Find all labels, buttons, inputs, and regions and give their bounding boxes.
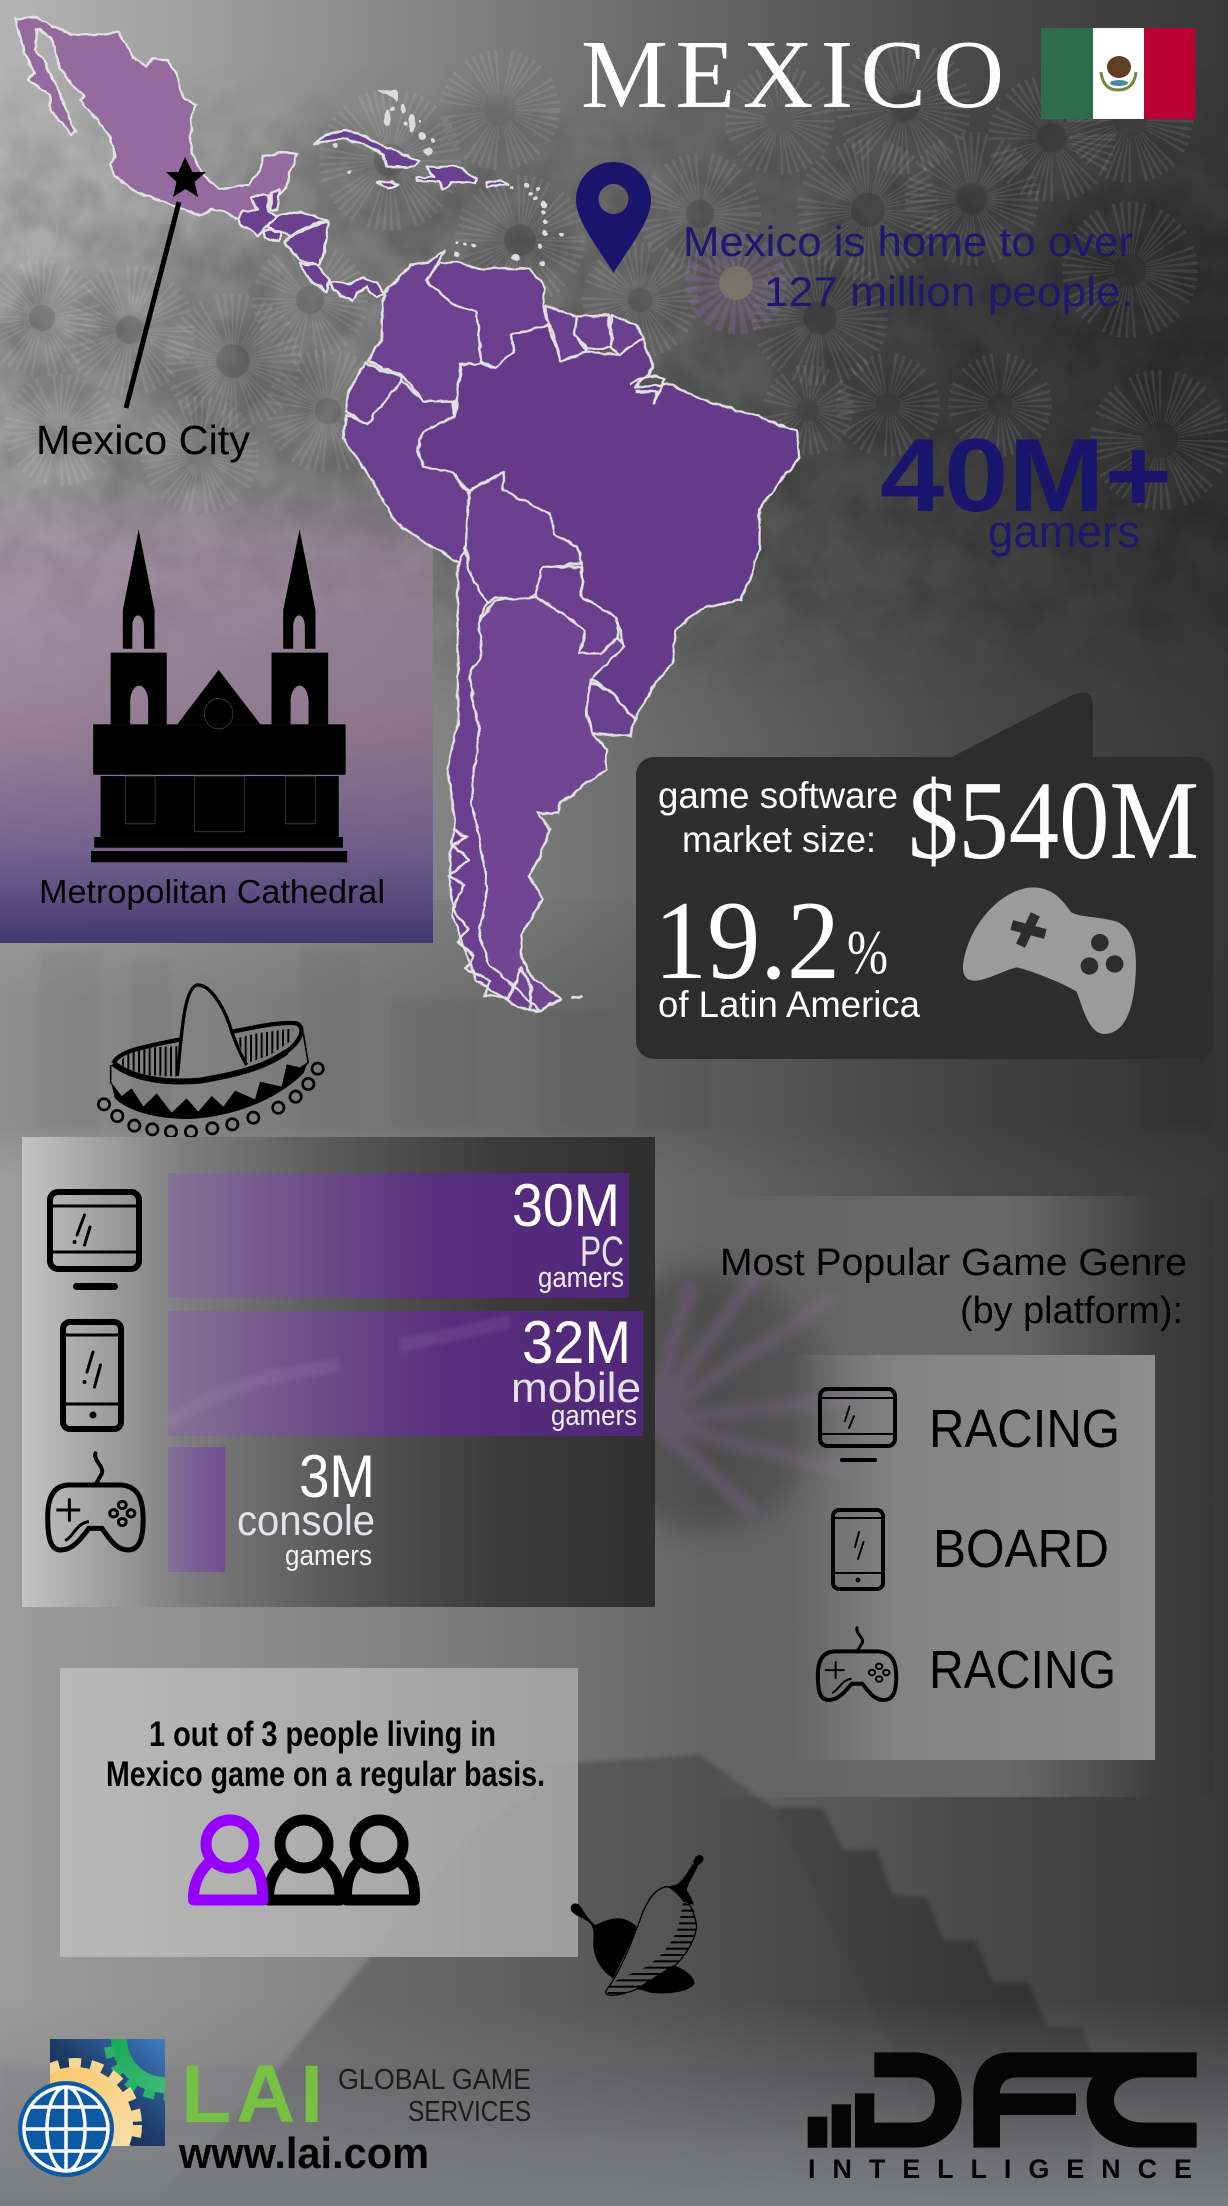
southern Chile fjords (450, 375, 664, 1012)
French Guiana (611, 315, 643, 355)
label: Mexico City: Mexico City (36, 417, 250, 463)
icon: gamepad (818, 1628, 896, 1700)
stat: 19.2%: % (847, 919, 888, 987)
text: population (683, 218, 1133, 315)
bar: PC gamers: PC (580, 1228, 624, 1276)
icon: DFC mark (808, 2052, 1197, 2148)
Suriname (574, 315, 611, 348)
heading: most popular game genre (720, 1242, 1187, 1332)
text: global game services: SERVICES (408, 2096, 531, 2128)
icon: map pin (576, 162, 651, 273)
icon: PC monitor (50, 1192, 139, 1290)
text: market size label: game software (658, 775, 898, 816)
label: racing (PC): RACING (929, 1399, 1120, 1459)
bar: mobile gamers: 32M (522, 1309, 631, 1376)
icon: star marking Mexico City (166, 157, 206, 197)
label: Metropolitan Cathedral: Metropolitan Cathedral (39, 873, 385, 910)
Brazil (418, 325, 799, 720)
label: board (mobile): BOARD (933, 1519, 1109, 1579)
panel: 1 out of 3 people (60, 1668, 578, 1957)
panel: Metropolitan Cathedral (0, 487, 433, 943)
Mexico (16, 18, 298, 220)
South America (343, 251, 799, 1012)
inner panel: genre list (788, 1355, 1155, 1760)
label: racing (console): RACING (929, 1640, 1116, 1700)
bar: console gamers: gamers (285, 1540, 372, 1572)
logo: LAI Global Game Services (18, 2039, 530, 2177)
icon: tablet (833, 1510, 883, 1589)
icon: sombrero (98, 985, 323, 1137)
stat: 40M+ gamers: gamers (988, 506, 1140, 557)
bar: PC gamers: 30M (512, 1172, 620, 1239)
icon: chili peppers (571, 1855, 704, 1995)
icon: three people, one highlighted (193, 1820, 415, 1900)
text: market size label: market size: (682, 819, 876, 860)
icon: game controller (963, 887, 1136, 1034)
text: 1 out of 3: Mexico game on a regular basis. (106, 1755, 545, 1794)
bar: mobile gamers: gamers (551, 1400, 637, 1432)
bar: PC gamers (168, 1172, 629, 1298)
bar: console gamers: 3M (299, 1443, 375, 1510)
Venezuela (428, 262, 548, 368)
Central America (238, 189, 383, 302)
text: market size label (658, 775, 898, 860)
title: MEXICO (581, 21, 1004, 129)
Uruguay (586, 683, 635, 736)
icon: phone (63, 1322, 121, 1429)
logo: DFC Intelligence (808, 2052, 1197, 2184)
Bolivia (466, 472, 582, 604)
panel: most popular game genre (708, 1196, 1213, 1797)
text: population: Mexico is home to over (683, 218, 1133, 265)
bar: mobile gamers: mobile (511, 1364, 641, 1411)
wordmark: LAI: LAI (181, 2049, 323, 2140)
heading: most popular game genre: (by platform): (960, 1290, 1183, 1332)
stat: $540M: $540M (908, 759, 1199, 883)
stat: 19.2%: 19.2 (654, 879, 840, 1003)
Guyana (545, 305, 588, 361)
bar: PC gamers: gamers (538, 1262, 624, 1294)
purple spiky flower behind panels (550, 1270, 850, 1530)
text: of Latin America: of Latin America (658, 984, 920, 1025)
icon: Mexican flag (1041, 28, 1196, 119)
Ecuador (347, 363, 402, 425)
bar: console gamers: console (237, 1497, 375, 1545)
bar: console gamers (168, 1443, 375, 1572)
text: intelligence: INTELLIGENCE (808, 2154, 1192, 2184)
city skyline texture (40, 950, 1210, 1130)
Chichen Itza pyramid texture (0, 1755, 1228, 2206)
icon: LAI gears and globe (18, 2039, 165, 2177)
map: Latin America (16, 18, 799, 1012)
panel: game software market (636, 692, 1214, 1059)
Argentina (468, 597, 625, 1012)
icon: cathedral silhouette (91, 529, 347, 862)
heading: most popular game genre: Most Popular Game Genre (720, 1242, 1187, 1284)
panel: gamers by platform (22, 1137, 655, 1607)
text: global game services (338, 2064, 531, 2128)
Caribbean islands (314, 90, 563, 266)
text: global game services: GLOBAL GAME (338, 2064, 531, 2096)
text: website: www.lai.com (178, 2129, 429, 2178)
stat: 40M+ gamers: 40M+ (880, 418, 1172, 534)
flower texture (0, 65, 1228, 491)
bar: mobile gamers (168, 1309, 643, 1436)
Colombia (368, 251, 482, 418)
icon: gamepad (48, 1453, 143, 1550)
text: 1 out of 3 (106, 1715, 545, 1794)
Chile (447, 551, 540, 1012)
text: 1 out of 3: 1 out of 3 people living in (149, 1715, 496, 1754)
Peru (343, 381, 468, 562)
purple flower behind population text (702, 249, 770, 317)
pointer line to Mexico City (126, 202, 179, 408)
Paraguay (536, 567, 618, 653)
icon: PC monitor (820, 1389, 895, 1462)
text: population: 127 million people. (764, 268, 1133, 315)
